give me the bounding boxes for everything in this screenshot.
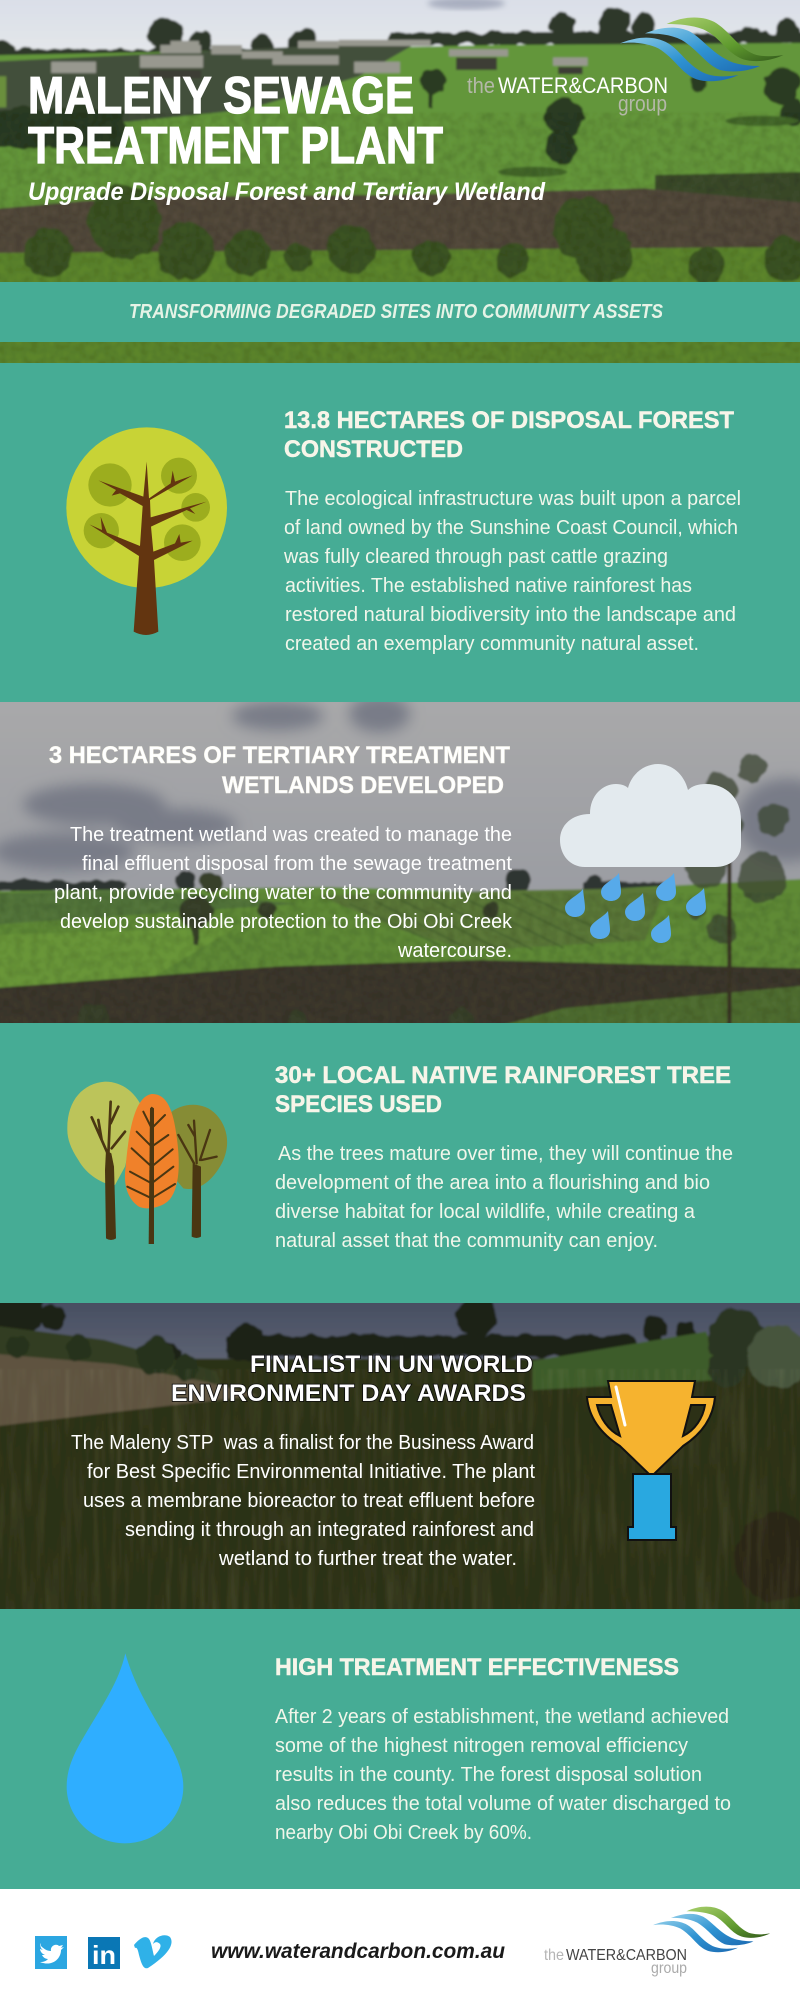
footer xyxy=(0,1889,800,2000)
heading xyxy=(49,742,510,799)
body text: sending it through an integrated rainforest and xyxy=(125,1518,534,1541)
body text: As the trees mature over time, they will continue the xyxy=(278,1142,733,1165)
body text xyxy=(275,1705,731,1844)
heading xyxy=(171,1351,533,1407)
title xyxy=(28,67,443,175)
body text: develop sustainable protection to the Obi Obi Creek xyxy=(60,910,513,933)
body text: watercourse. xyxy=(397,939,512,962)
panel: awards finalist xyxy=(0,1284,800,1616)
logo wordmark: the xyxy=(544,1947,564,1964)
panel: tertiary wetlands xyxy=(0,695,800,1040)
body text: wetland to further treat the water. xyxy=(218,1547,517,1570)
hero photo: hillside landscape xyxy=(0,0,800,363)
body text: final effluent disposal from the sewage treatment xyxy=(82,852,512,875)
body text: activities. The established native rainforest has xyxy=(285,574,692,597)
subtitle: Upgrade Disposal Forest and Tertiary Wetland xyxy=(28,178,546,206)
icon: linkedin xyxy=(88,1937,120,1970)
logo: the water and carbon group xyxy=(467,18,783,116)
body text xyxy=(54,823,513,962)
icon: three trees xyxy=(67,1082,227,1244)
icon: water drop xyxy=(67,1653,183,1843)
body text: The treatment wetland was created to manage the xyxy=(70,823,512,846)
logo: footer xyxy=(544,1907,770,1977)
heading: CONSTRUCTED xyxy=(284,436,463,463)
trophy stem and base xyxy=(628,1474,676,1540)
icon: twitter xyxy=(35,1936,67,1969)
wetland photo xyxy=(0,702,800,1023)
grassland photo xyxy=(0,1303,800,1609)
body text: restored natural biodiversity into the landscape and xyxy=(285,603,736,626)
heading: 30+ LOCAL NATIVE RAINFOREST TREE xyxy=(275,1062,731,1089)
body text xyxy=(275,1142,733,1252)
logo: footer: group xyxy=(651,1960,687,1977)
body text: The ecological infrastructure was built upon a parcel xyxy=(285,487,741,510)
logo: footer: WATER&CARBON xyxy=(566,1947,687,1964)
cloud xyxy=(560,764,741,867)
icon: vimeo xyxy=(134,1935,172,1968)
logo waves xyxy=(620,18,783,81)
body text: development of the area into a flourishing and bio xyxy=(275,1171,710,1194)
panel: native species xyxy=(0,1023,800,1303)
logo wordmark: the xyxy=(467,73,495,98)
panel: treatment effectiveness xyxy=(0,1609,800,1889)
banner: tagline: TRANSFORMING DEGRADED SITES INTO COMMUNITY ASSETS xyxy=(129,301,664,323)
panel: disposal forest xyxy=(0,363,800,702)
body text: uses a membrane bioreactor to treat effluent before xyxy=(83,1489,535,1512)
body text: nearby Obi Obi Creek by 60%. xyxy=(275,1821,532,1844)
heading: FINALIST IN UN WORLD xyxy=(250,1351,533,1378)
body text: of land owned by the Sunshine Coast Council, which xyxy=(284,516,738,539)
website url: www.waterandcarbon.com.au xyxy=(211,1940,505,1963)
logo waves xyxy=(653,1907,770,1952)
body text: was fully cleared through past cattle grazing xyxy=(283,545,668,568)
icon: linkedin: in xyxy=(92,1940,116,1970)
body text: natural asset that the community can enjoy. xyxy=(275,1229,658,1252)
trophy cup xyxy=(587,1381,715,1474)
heading: WETLANDS DEVELOPED xyxy=(222,772,504,799)
logo: the water and carbon group: group xyxy=(618,91,667,116)
rain drops xyxy=(565,873,706,943)
body text: results in the county. The forest disposal solution xyxy=(275,1763,702,1786)
logo: the water and carbon group: WATER&CARBON xyxy=(498,73,668,98)
heading: 3 HECTARES OF TERTIARY TREATMENT xyxy=(49,742,510,769)
heading: 13.8 HECTARES OF DISPOSAL FOREST xyxy=(284,407,734,434)
banner: tagline xyxy=(0,282,800,342)
heading: HIGH TREATMENT EFFECTIVENESS xyxy=(275,1654,679,1681)
body text: After 2 years of establishment, the wetland achieved xyxy=(275,1705,729,1728)
body text: The Maleny STP was a finalist for the Business Award xyxy=(71,1431,534,1454)
body text: some of the highest nitrogen removal efficiency xyxy=(275,1734,689,1757)
panel: hero xyxy=(0,0,800,378)
icon: round tree xyxy=(66,427,227,635)
body text xyxy=(283,487,741,655)
body text: also reduces the total volume of water discharged to xyxy=(275,1792,731,1815)
body text xyxy=(71,1431,535,1570)
body text: created an exemplary community natural asset. xyxy=(285,632,699,655)
icon: rain cloud xyxy=(560,764,741,943)
body text: plant, provide recycling water to the community and xyxy=(54,881,512,904)
body text: for Best Specific Environmental Initiative. The plant xyxy=(87,1460,535,1483)
heading: SPECIES USED xyxy=(275,1091,442,1118)
heading xyxy=(284,407,734,463)
title: TREATMENT PLANT xyxy=(28,117,443,175)
heading: ENVIRONMENT DAY AWARDS xyxy=(171,1380,526,1407)
icon: trophy xyxy=(587,1381,715,1540)
body text: diverse habitat for local wildlife, while creating a xyxy=(275,1200,696,1223)
heading xyxy=(275,1062,731,1118)
title: MALENY SEWAGE xyxy=(28,67,414,125)
